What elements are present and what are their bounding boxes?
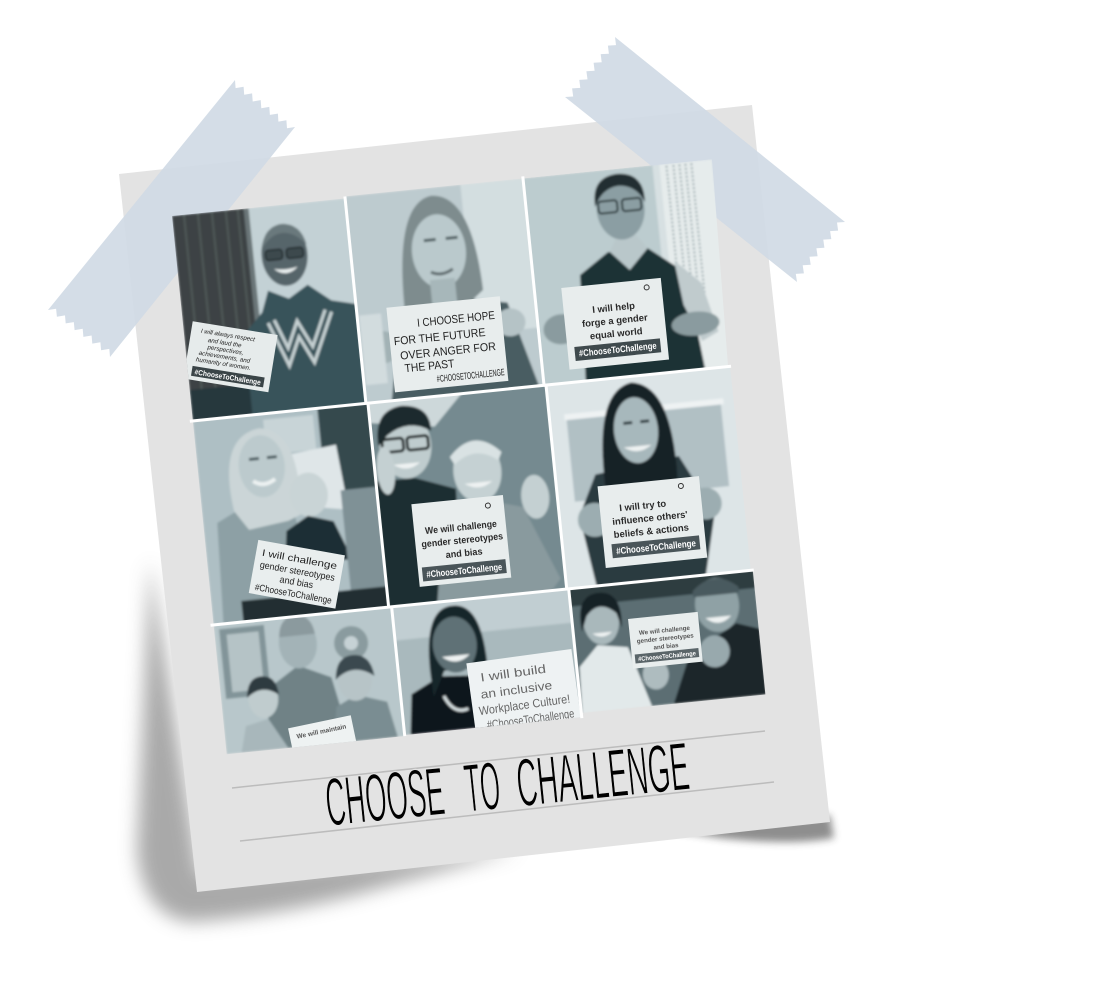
polaroid infographic <box>48 37 845 932</box>
sign: will challenge gender stereotypes: #ChooseToChallenge <box>254 582 333 607</box>
title: CHOOSE <box>322 753 448 841</box>
sign: influence others: #ChooseToChallenge <box>616 537 696 556</box>
sign: always respect: I will always respect <box>200 328 256 343</box>
sign: we will challenge: gender stereotypes <box>421 531 504 550</box>
photo 2: woman with handwritten sign <box>345 178 544 403</box>
sign: influence others: I will try to <box>619 499 667 514</box>
sign: choose hope: OVER ANGER FOR <box>400 341 496 363</box>
sign: inclusive workplace culture: #ChooseToChallenge <box>486 706 575 732</box>
polaroid infographic: CHALLENGE <box>513 728 693 822</box>
sign: inclusive workplace culture: an inclusive <box>480 678 553 702</box>
sign: choose hope: THE PAST <box>404 358 455 375</box>
sign: forge a gender equal world: forge a gender <box>582 312 649 330</box>
sign: choose hope: #CHOOSETOCHALLENGE <box>436 367 505 385</box>
photo grid <box>167 157 769 773</box>
polaroid paper <box>119 105 830 892</box>
sign: will challenge gender stereotypes <box>249 540 345 609</box>
sign: forge a gender equal world: equal world <box>589 326 643 342</box>
sign: inclusive workplace culture: Workplace Culture! <box>478 692 571 718</box>
photo 7: man with two girls <box>213 606 406 762</box>
photo 5: couple waving <box>368 385 567 607</box>
title: TO <box>461 748 504 827</box>
sign: always respect: achievements, and <box>198 350 251 365</box>
sign: we will challenge <box>411 495 511 587</box>
sign: always respect <box>183 321 278 392</box>
drop shadow: left and bottom <box>137 560 834 922</box>
sign: will challenge gender stereotypes: and bias <box>279 574 314 591</box>
sign: will challenge gender stereotypes: gender stereotypes <box>259 560 336 584</box>
sign: forge a gender equal world: I will help <box>592 301 636 316</box>
sign: we will challenge: We will challenge <box>425 519 497 537</box>
sign: we will maintain <box>288 715 356 748</box>
photo 1: man in hoodie <box>167 198 366 421</box>
sign: we will challenge: #ChooseToChallenge <box>426 561 503 580</box>
sign: choose hope: I CHOOSE HOPE <box>417 310 496 330</box>
sign: always respect: and laud the <box>207 337 243 349</box>
tape: right <box>565 37 845 282</box>
sign: always respect: humanity of women. <box>195 356 251 372</box>
sign: car sign: and bias <box>653 642 679 652</box>
sign: choose hope <box>386 296 508 392</box>
photo 4: woman with baby <box>193 403 389 625</box>
sign: forge a gender equal world <box>561 278 669 370</box>
sign: car sign: #ChooseToChallenge <box>638 650 697 663</box>
sign: always respect: perspectives, <box>206 344 244 357</box>
sign: influence others <box>598 476 707 568</box>
sign: inclusive workplace culture: I will build <box>479 662 547 685</box>
sign: will challenge gender stereotypes: I will challenge <box>261 548 338 572</box>
sign: always respect: #ChooseToChallenge <box>194 367 262 387</box>
sign: we will challenge: and bias <box>445 546 483 561</box>
caption rule lines <box>232 731 774 841</box>
photo 8: woman with braids <box>393 590 580 735</box>
sign: car sign: gender stereotypes <box>636 632 695 645</box>
sign: car sign <box>628 612 703 669</box>
sign: car sign: We will challenge <box>639 625 691 637</box>
sign: we will maintain: We will maintain <box>296 723 347 741</box>
tape: left <box>48 80 295 357</box>
sign: influence others: beliefs & actions <box>613 522 689 541</box>
sign: influence others: influence others' <box>612 509 688 528</box>
sign: inclusive workplace culture <box>466 649 580 728</box>
sign: choose hope: FOR THE FUTURE <box>393 327 486 348</box>
photo 6: woman with long hair <box>564 380 730 584</box>
sign: forge a gender equal world: #ChooseToChallenge <box>578 340 657 359</box>
photo 9: girl and man in car <box>569 570 766 713</box>
photo 3: man in vest <box>523 159 733 385</box>
